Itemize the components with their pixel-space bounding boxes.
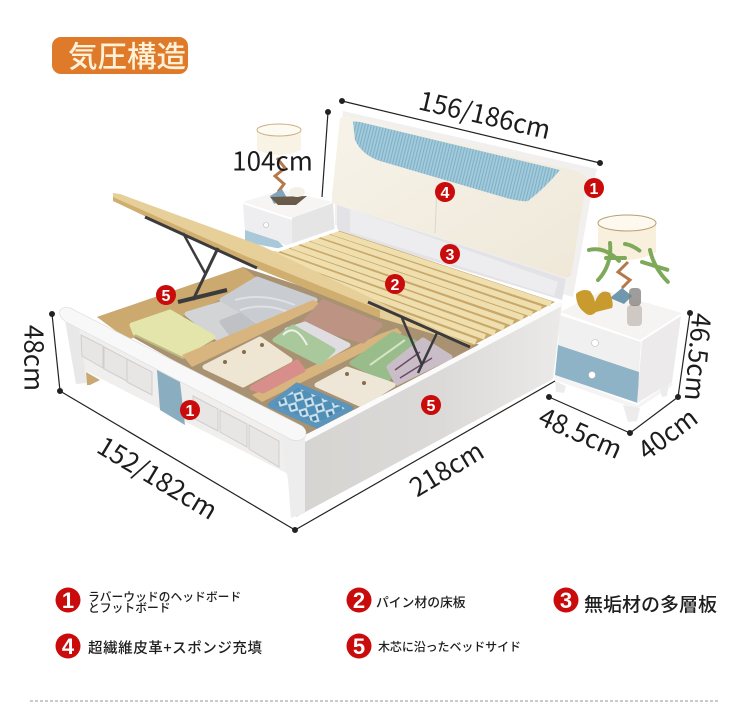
bed markers: 5 <box>427 398 436 415</box>
legend item 3: 3 <box>560 588 572 613</box>
bed markers: 1 <box>186 403 195 420</box>
gas-lift mechanisms <box>145 217 470 373</box>
bed markers: 3 <box>446 247 455 264</box>
legend item 4: 4 <box>62 634 75 659</box>
right leg post <box>280 438 305 518</box>
dimension labels: 152/182cm <box>91 427 225 527</box>
legend item 5 <box>346 634 521 659</box>
legend item 5: 5 <box>353 634 365 659</box>
footboard carved panels <box>81 335 279 467</box>
legend item 5: 木芯に沿ったベッドサイド <box>378 638 521 655</box>
legend item 3: 無垢材の多層板 <box>584 590 717 617</box>
legend item 2: 2 <box>353 588 365 613</box>
table lamp with plant and ornaments <box>576 215 668 326</box>
legend item 1 <box>56 588 241 616</box>
right nightstand <box>555 290 682 422</box>
dimension labels: 46.5cm <box>677 312 721 402</box>
legend item 1: 1 <box>62 588 74 613</box>
left nightstand with lamp <box>243 124 335 250</box>
nightstand legs <box>555 381 669 422</box>
legend item 2: パイン材の床板 <box>376 592 466 611</box>
gold ornaments <box>576 290 613 315</box>
legend item 4: 超繊維皮革+スポンジ充填 <box>88 637 262 658</box>
drawer knobs <box>592 340 598 346</box>
legend item 1: ラバーウッドのヘッドボード <box>88 588 241 605</box>
dimension labels <box>16 81 721 527</box>
slatted bed platform <box>251 228 555 347</box>
blue headboard panel <box>353 122 560 201</box>
blue footboard inlay <box>157 370 185 425</box>
dimension labels: 48cm <box>16 325 54 391</box>
bed markers: 5 <box>162 288 171 305</box>
headboard <box>332 111 597 300</box>
bed markers: 1 <box>590 181 599 198</box>
title badge: 気圧構造 <box>68 34 186 76</box>
wood dividers <box>182 300 322 367</box>
legend item 1: とフットボード <box>88 599 171 616</box>
bed markers <box>156 178 604 420</box>
legend item 4 <box>56 634 262 659</box>
bed markers: 4 <box>441 185 450 202</box>
lifted board edge <box>113 193 470 345</box>
dimension lines <box>50 99 692 532</box>
legend item 2 <box>346 588 466 613</box>
dimension labels: 104cm <box>232 142 313 178</box>
bed markers: 2 <box>391 277 400 294</box>
folded clothes middle and front <box>205 302 450 426</box>
vase <box>627 288 642 326</box>
storage interior <box>97 267 480 435</box>
folded clothes <box>132 279 315 358</box>
dimension labels: 156/186cm <box>416 81 554 147</box>
dimension labels: 48.5cm <box>533 397 629 467</box>
plant leaves <box>589 243 668 282</box>
top rail <box>60 307 306 441</box>
footboard <box>60 307 306 518</box>
dimension labels: 40cm <box>629 398 705 468</box>
right bed side panel <box>296 302 562 517</box>
dimension labels: 218cm <box>402 431 490 505</box>
